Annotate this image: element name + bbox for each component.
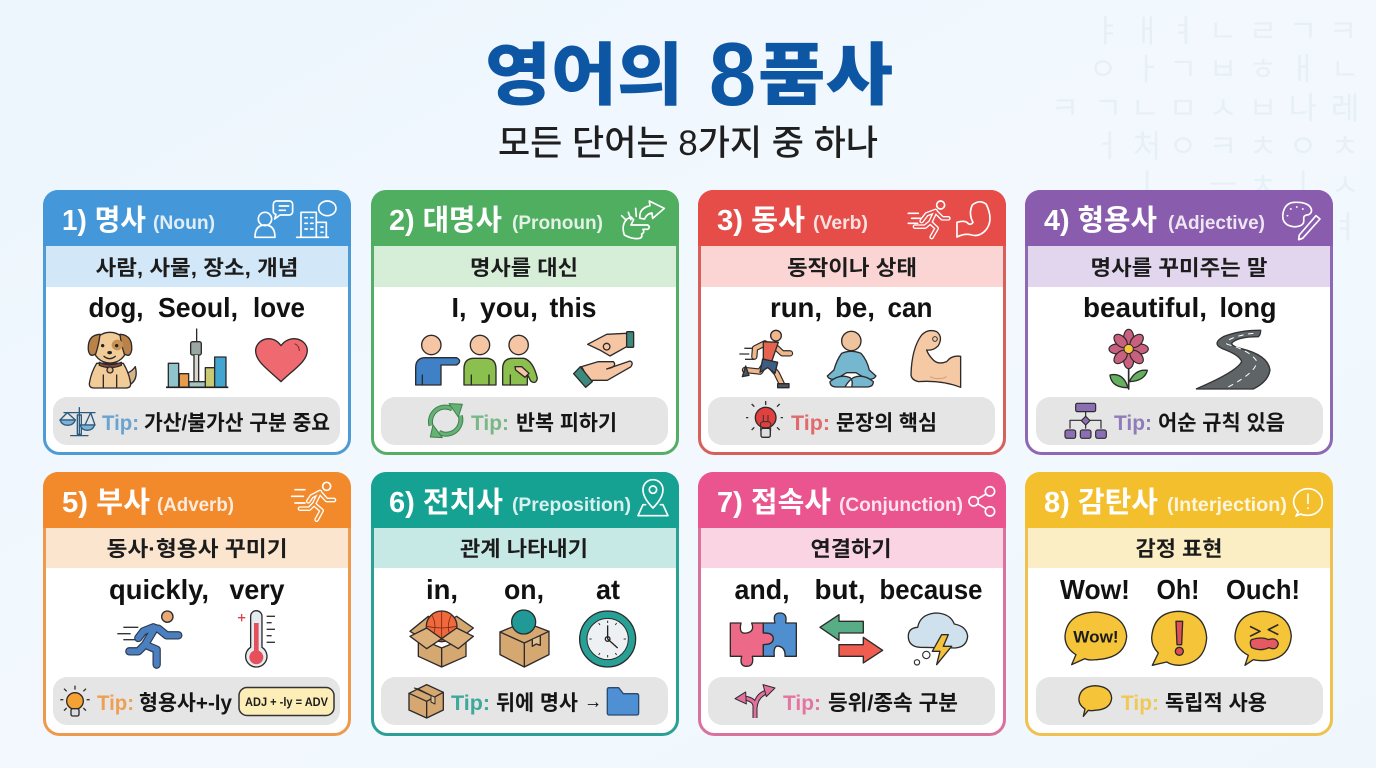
icon: folder bbox=[607, 688, 639, 715]
definition: pronoun: 명사를 대신 bbox=[470, 257, 578, 280]
heading: preposition bbox=[389, 486, 631, 519]
background: faint hangul letters: ㄱ bbox=[1289, 14, 1317, 49]
examples: adverb: quickly, bbox=[109, 574, 209, 605]
icon: puzzle pieces bbox=[730, 613, 796, 666]
background: faint hangul letters: ㅐ bbox=[1133, 14, 1161, 49]
icon: balance scales bbox=[60, 408, 95, 436]
panel: 5 adverb bbox=[43, 472, 351, 734]
examples: interjection: Wow! bbox=[1060, 574, 1130, 605]
background: faint hangul letters: ㅅ bbox=[1331, 168, 1359, 203]
background: faint hangul letters: ㅣ bbox=[1289, 168, 1317, 203]
icon: wow bubble bbox=[1065, 612, 1127, 665]
heading: adjective: (Adjective) bbox=[1168, 212, 1265, 234]
examples: preposition: at bbox=[596, 574, 620, 605]
icon: heart bbox=[256, 339, 307, 382]
title: 8 bbox=[709, 25, 756, 125]
icon: Seoul skyline bbox=[166, 329, 228, 387]
examples: verb: run, bbox=[770, 292, 822, 323]
icon: fast runner outline bbox=[292, 482, 334, 520]
heading: adjective: 4) 형용사 bbox=[1044, 204, 1157, 237]
icon: runner and muscle bbox=[908, 201, 990, 237]
tip: coordinating and subordinating: Tip: bbox=[783, 692, 821, 715]
icon: cardboard box bbox=[409, 685, 443, 718]
title bbox=[485, 25, 893, 125]
heading: noun bbox=[62, 204, 215, 237]
background: faint hangul letters: ㅏ bbox=[1133, 52, 1161, 87]
formula badge: ADJ + -ly = ADV bbox=[245, 697, 328, 709]
background: faint hangul letters: ㅡ bbox=[1209, 168, 1237, 203]
icon: recycle arrows bbox=[430, 404, 462, 438]
examples: noun bbox=[88, 292, 305, 323]
icon: exclamation bubble yellow bbox=[1152, 611, 1207, 665]
examples: verb: can bbox=[888, 292, 932, 323]
heading: conjunction: 7) 접속사 bbox=[717, 486, 831, 519]
icon: clock bbox=[580, 611, 636, 667]
background: faint hangul letters: ㅇ bbox=[1169, 129, 1197, 164]
heading: preposition: (Preposition) bbox=[512, 494, 631, 516]
examples: pronoun bbox=[452, 292, 596, 323]
icon: meditating person bbox=[827, 331, 876, 387]
heading: conjunction bbox=[717, 486, 963, 519]
examples: pronoun: I, bbox=[452, 292, 466, 323]
examples: noun: Seoul, bbox=[158, 292, 238, 323]
examples: adverb: very bbox=[230, 574, 285, 605]
definition: conjunction: 연결하기 bbox=[810, 538, 892, 561]
icon: share nodes bbox=[969, 487, 995, 516]
heading: interjection: (Interjection) bbox=[1167, 494, 1287, 516]
icon: opposite arrows bbox=[820, 615, 883, 663]
background: faint hangul letters: ㅕ bbox=[1331, 210, 1359, 245]
background: faint hangul letters: 나 bbox=[1289, 91, 1317, 126]
background: faint hangul letters: ㄱ bbox=[1169, 52, 1197, 87]
background: faint hangul letters: ㅂ bbox=[1209, 52, 1237, 87]
tip: followed by noun bbox=[381, 677, 668, 725]
background: faint hangul letters: ㄹ bbox=[1249, 14, 1277, 49]
icon: blue runner bbox=[117, 611, 178, 665]
icon: palette and pencil bbox=[1283, 202, 1320, 240]
icon: map pin bbox=[638, 480, 668, 516]
background: faint hangul letters: ㅇ bbox=[1089, 52, 1117, 87]
background: faint hangul letters: ㅇ bbox=[1289, 129, 1317, 164]
icon: winding road bbox=[1196, 330, 1270, 389]
formula badge bbox=[239, 688, 334, 716]
heading: verb: (Verb) bbox=[813, 212, 868, 234]
icon: pointing hand and arrow bbox=[622, 201, 664, 239]
tip: independent use bbox=[1036, 677, 1323, 725]
title: 품사 bbox=[758, 38, 893, 114]
background: faint hangul letters: ㄴ bbox=[1209, 14, 1237, 49]
panel: 6 preposition bbox=[371, 472, 679, 734]
heading: pronoun: 2) 대명사 bbox=[389, 204, 502, 237]
heading: verb: 3) 동사 bbox=[717, 204, 805, 237]
examples: noun: dog, bbox=[88, 292, 144, 323]
examples: conjunction: and, bbox=[734, 574, 790, 605]
examples: preposition: in, bbox=[426, 574, 458, 605]
tip: avoid repetition: Tip: bbox=[471, 412, 509, 435]
icon: exclamation bubble bbox=[1294, 489, 1322, 516]
examples: preposition: on, bbox=[504, 574, 544, 605]
tip: independent use: Tip: bbox=[1121, 692, 1159, 715]
icon: red lightbulb bbox=[746, 401, 783, 437]
examples: verb bbox=[770, 292, 932, 323]
background: faint hangul letters: ㅓ bbox=[1093, 129, 1121, 164]
background: faint hangul letters: ㅊ bbox=[1249, 168, 1277, 203]
icon: wow bubble: Wow! bbox=[1073, 627, 1119, 646]
icon: ball in box bbox=[410, 611, 473, 667]
background: faint hangul letters: ㅅ bbox=[1209, 91, 1237, 126]
background: faint hangul letters: ㄴ bbox=[1131, 91, 1159, 126]
tip: countable nouns: 가산/불가산 구분 중요 bbox=[144, 412, 330, 435]
examples: conjunction: because bbox=[880, 574, 982, 605]
tip: core of the sentence bbox=[708, 397, 995, 445]
tip: independent use: 독립적 사용 bbox=[1165, 692, 1267, 715]
tip: word order: Tip: bbox=[1114, 412, 1152, 435]
tip: word order bbox=[1036, 397, 1323, 445]
heading: interjection: 8) 감탄사 bbox=[1044, 486, 1158, 519]
definition: adverb: 동사·형용사 꾸미기 bbox=[106, 538, 288, 561]
background: faint hangul letters: ㅁ bbox=[1169, 91, 1197, 126]
panel: 8 interjection bbox=[1025, 472, 1333, 734]
panel: 4 adjective bbox=[1025, 190, 1333, 454]
icon: hands giving bbox=[574, 332, 634, 387]
icon: flexed arm bbox=[911, 331, 961, 387]
background: faint hangul letters: ㅕ bbox=[1169, 14, 1197, 49]
examples: interjection bbox=[1060, 574, 1300, 605]
tip: avoid repetition bbox=[381, 397, 668, 445]
definition: verb: 동작이나 상태 bbox=[787, 257, 917, 280]
arrow: → bbox=[584, 690, 602, 713]
background: faint hangul letters: ㅋ bbox=[1051, 91, 1079, 126]
background: faint hangul letters: ㅊ bbox=[1249, 129, 1277, 164]
examples: preposition bbox=[426, 574, 620, 605]
definition: adjective: 명사를 꾸미주는 말 bbox=[1090, 257, 1268, 280]
icon: forked arrow bbox=[735, 685, 775, 718]
icon: storm cloud bbox=[908, 613, 968, 665]
heading: noun: 1) 명사 bbox=[62, 204, 146, 237]
tip: core of the sentence: 문장의 핵심 bbox=[836, 412, 937, 435]
examples: verb: be, bbox=[835, 292, 875, 323]
examples: pronoun: this bbox=[550, 292, 596, 323]
heading: adverb bbox=[62, 486, 234, 519]
heading: conjunction: (Conjunction) bbox=[839, 494, 963, 516]
examples: adjective bbox=[1083, 292, 1276, 323]
icon: person and building bbox=[255, 201, 336, 237]
heading: verb bbox=[717, 204, 868, 237]
background: faint hangul letters: 처 bbox=[1133, 129, 1161, 164]
background: faint hangul letters: ㅊ bbox=[1331, 129, 1359, 164]
tip: avoid repetition: 반복 피하기 bbox=[516, 412, 617, 435]
background: faint hangul letters: ㅣ bbox=[1133, 168, 1161, 203]
examples: adjective: long bbox=[1220, 292, 1276, 323]
icon: dog bbox=[88, 332, 136, 388]
examples: conjunction: but, bbox=[814, 574, 866, 605]
icon: flower bbox=[1109, 329, 1148, 389]
icon: small yellow bubble bbox=[1079, 686, 1112, 716]
background: faint hangul letters: ㅐ bbox=[1289, 52, 1317, 87]
background: faint hangul letters: ㄴ bbox=[1331, 52, 1359, 87]
icon: thermometer bbox=[238, 611, 275, 667]
examples: pronoun: you, bbox=[480, 292, 538, 323]
background: faint hangul letters: ㅋ bbox=[1329, 14, 1357, 49]
examples: adverb bbox=[109, 574, 285, 605]
title: 영어의 bbox=[485, 38, 683, 114]
definition: preposition: 관계 나타내기 bbox=[460, 538, 588, 561]
icon: crying bubble bbox=[1235, 611, 1291, 665]
background: faint hangul letters: ㅋ bbox=[1209, 129, 1237, 164]
icon: red runner bbox=[739, 330, 790, 388]
examples: interjection: Ouch! bbox=[1226, 574, 1300, 605]
tip: coordinating and subordinating bbox=[708, 677, 995, 725]
panel: 3 verb bbox=[698, 190, 1006, 454]
heading: preposition: 6) 전치사 bbox=[389, 486, 503, 519]
definition: interjection: 감정 표현 bbox=[1136, 538, 1222, 561]
tip: followed by noun: 뒤에 명사 bbox=[496, 692, 578, 715]
tip: adjective plus ly: Tip: bbox=[97, 692, 134, 715]
tip: adjective plus ly: 형용사+-ly bbox=[139, 692, 232, 715]
background: faint hangul letters: ㅂ bbox=[1249, 91, 1277, 126]
tip: coordinating and subordinating: 등위/종속 구분 bbox=[828, 692, 958, 715]
heading: noun: (Noun) bbox=[153, 212, 215, 234]
heading: adjective bbox=[1044, 204, 1265, 237]
definition: noun: 사람, 사물, 장소, 개념 bbox=[96, 257, 298, 280]
background: faint hangul letters bbox=[1051, 14, 1359, 245]
tip: word order: 어순 규칙 있음 bbox=[1158, 412, 1285, 435]
panel: 7 conjunction bbox=[698, 472, 1006, 734]
tip: countable nouns bbox=[53, 397, 340, 445]
icon: flow chart bbox=[1065, 403, 1106, 438]
examples: adjective: beautiful, bbox=[1083, 292, 1207, 323]
examples: interjection: Oh! bbox=[1156, 574, 1200, 605]
examples: noun: love bbox=[253, 292, 305, 323]
panel: 1 noun bbox=[43, 190, 351, 454]
background: faint hangul letters: ㅑ bbox=[1093, 14, 1121, 49]
tip: countable nouns: Tip: bbox=[102, 412, 139, 435]
tip: followed by noun: Tip: bbox=[451, 692, 490, 715]
background: faint hangul letters: ㅎ bbox=[1249, 52, 1277, 87]
heading: adverb: (Adverb) bbox=[157, 494, 234, 516]
icon: ball on box bbox=[500, 610, 549, 667]
examples: conjunction bbox=[734, 574, 982, 605]
icon: orange bulb bbox=[60, 686, 90, 716]
heading: pronoun: (Pronoun) bbox=[512, 212, 603, 234]
subtitle: 모든 단어는 8가지 중 하나 bbox=[498, 124, 878, 163]
heading: pronoun bbox=[389, 204, 603, 237]
tip: adjective plus ly bbox=[53, 677, 340, 725]
icon: three people pointing bbox=[416, 335, 537, 385]
tip: core of the sentence: Tip: bbox=[791, 412, 830, 435]
background: faint hangul letters: ㄱ bbox=[1094, 91, 1122, 126]
background: faint hangul letters: 레 bbox=[1331, 91, 1359, 126]
heading: interjection bbox=[1044, 486, 1287, 519]
panel: 2 pronoun bbox=[371, 190, 679, 454]
heading: adverb: 5) 부사 bbox=[62, 486, 150, 519]
